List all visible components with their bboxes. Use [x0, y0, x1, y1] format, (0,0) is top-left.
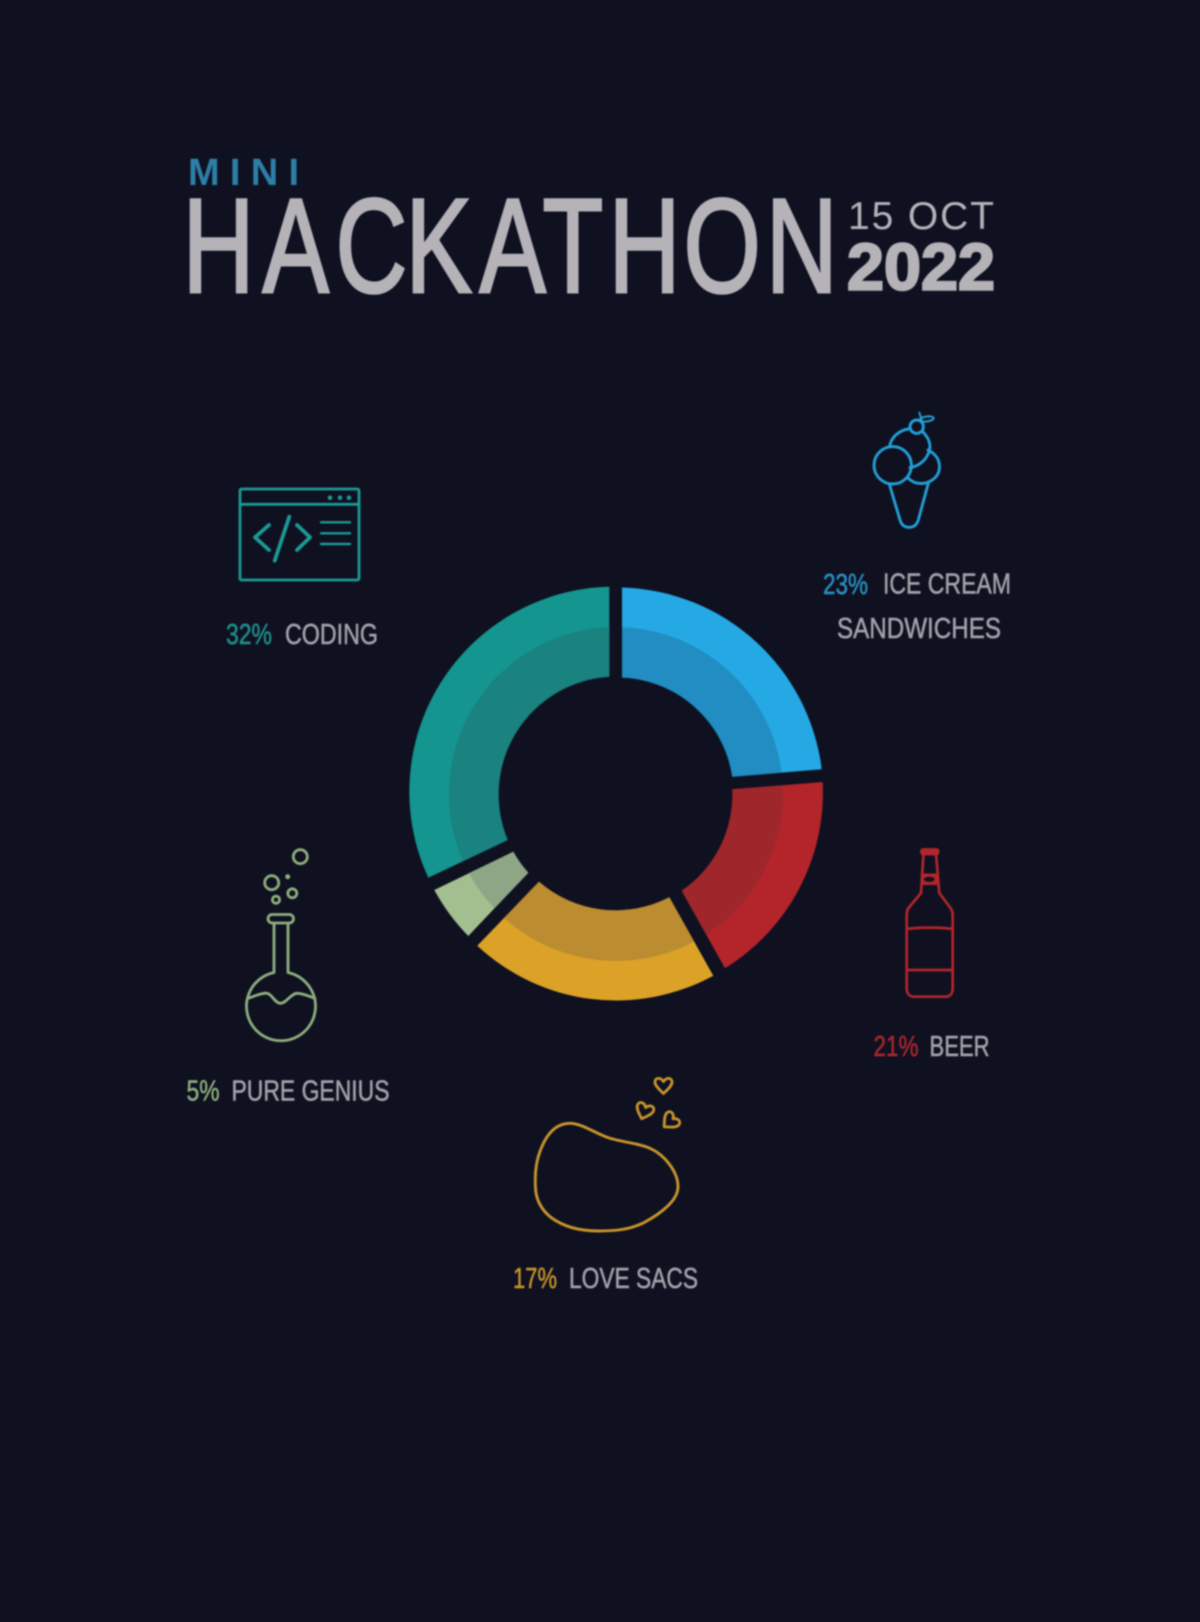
segment: ice cream sandwiches 23%	[622, 588, 822, 777]
label: 23% ice cream sandwiches: SANDWICHES	[837, 613, 1001, 645]
heading: hackathon: HACKATHON	[183, 170, 838, 320]
label: 17% love sacs: LOVE SACS	[569, 1263, 698, 1295]
segment: beer 21%	[682, 782, 823, 968]
label: 21% beer	[874, 1031, 990, 1063]
label: 23% ice cream sandwiches: 23%	[823, 569, 868, 601]
icon: flask	[246, 850, 316, 1041]
segment: coding 32%	[409, 587, 609, 878]
heading: mini: MINI	[188, 152, 299, 194]
label: 23% ice cream sandwiches	[823, 568, 1011, 645]
label: 23% ice cream sandwiches: ICE CREAM	[883, 568, 1011, 600]
label: 17% love sacs: 17%	[513, 1263, 557, 1295]
label: 32% coding	[226, 619, 378, 651]
infographic canvas	[186, 158, 1010, 1290]
date: 15 oct: 15 OCT	[848, 195, 994, 238]
label: 5% pure genius	[186, 1076, 390, 1108]
title block	[183, 152, 995, 320]
label: 5% pure genius: PURE GENIUS	[232, 1076, 390, 1108]
label: 17% love sacs	[513, 1263, 698, 1295]
segment: love sacs 17%	[477, 882, 713, 1001]
icon: code window	[240, 489, 359, 580]
segment: pure genius 5%	[434, 852, 528, 936]
label: 5% pure genius: 5%	[186, 1076, 220, 1108]
year: 2022: 2022	[847, 230, 995, 304]
icon: ice cream	[874, 413, 940, 527]
label: 21% beer: 21%	[874, 1031, 918, 1063]
label: 32% coding: 32%	[226, 619, 272, 651]
label: 21% beer: BEER	[930, 1031, 990, 1063]
label: 32% coding: CODING	[285, 619, 378, 651]
donut chart	[409, 587, 823, 1001]
icon: love sac with hearts	[535, 1078, 681, 1231]
icon: beer bottle	[907, 850, 953, 997]
